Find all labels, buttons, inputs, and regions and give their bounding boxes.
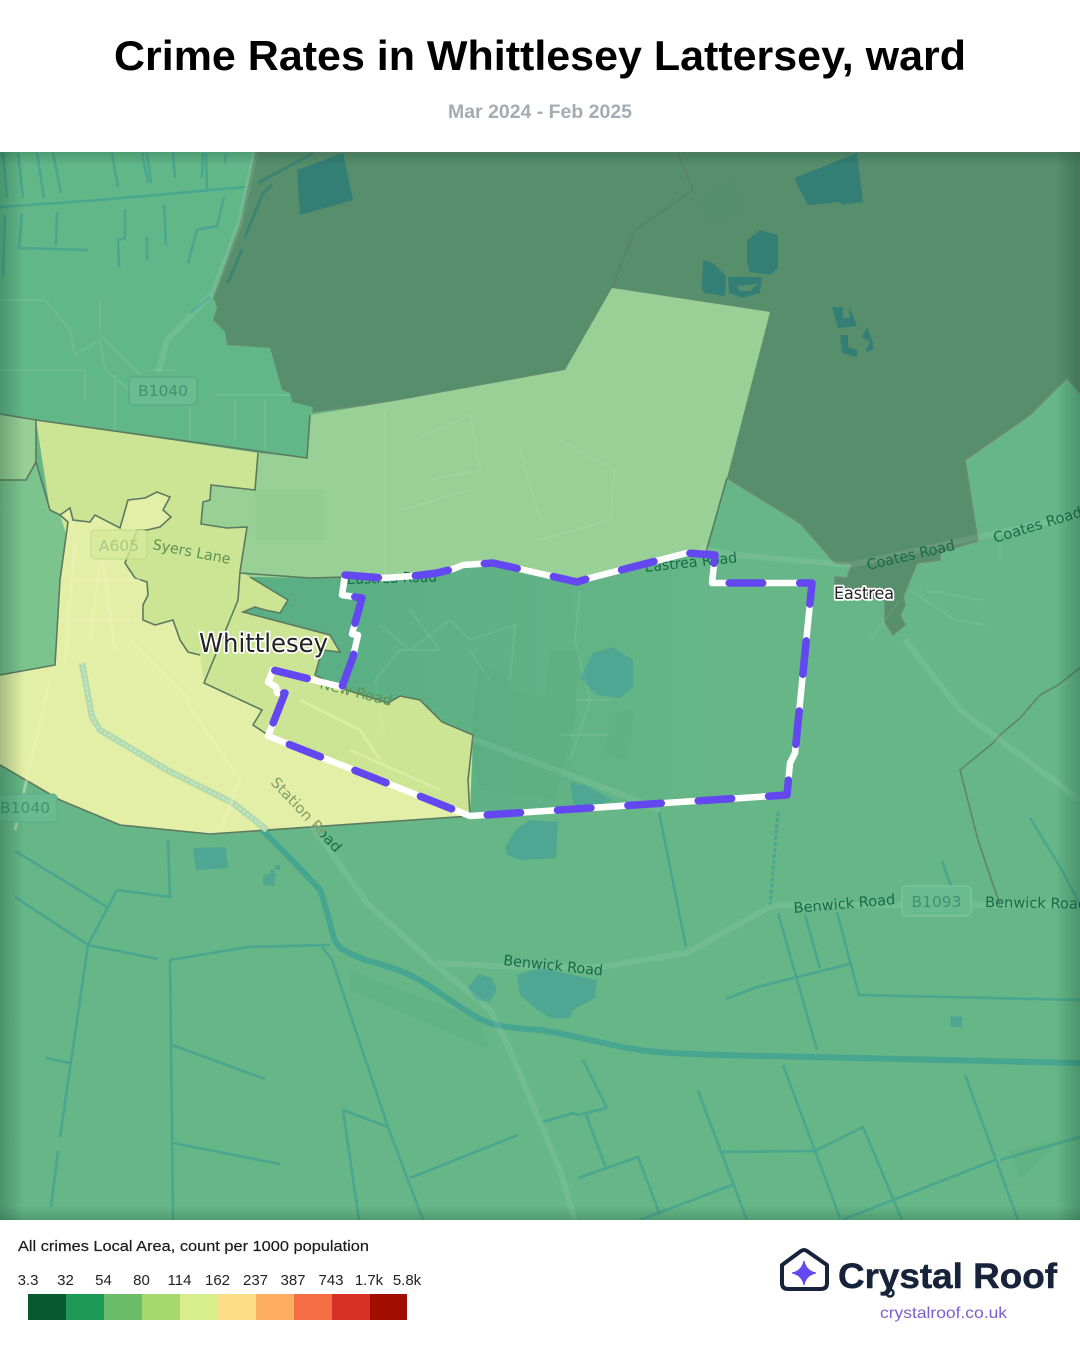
label: Benwick Road south: Benwick Road xyxy=(503,953,604,979)
legend scale labels: 32 xyxy=(57,1272,74,1289)
pond dots xyxy=(270,865,280,877)
road shield: B1040 west: B1040 xyxy=(0,799,50,817)
place label: Whittlesey: Whittlesey xyxy=(199,629,328,659)
legend title: All crimes Local Area, count per 1000 population xyxy=(18,1238,369,1255)
canal centre line xyxy=(82,663,267,830)
road shield: B1093: B1093 xyxy=(911,893,962,911)
legend scale labels xyxy=(18,1272,422,1289)
legend scale labels: 5.8k xyxy=(393,1272,422,1289)
land patches xyxy=(470,735,472,743)
drains in dark area xyxy=(228,153,313,283)
wordmark: Crystal Roof xyxy=(838,1257,1057,1296)
subtitle: date range: Mar 2024 - Feb 2025 xyxy=(448,102,632,123)
ward outline white base xyxy=(268,553,812,816)
legend scale labels: 237 xyxy=(243,1272,268,1289)
label: Coates Road 1: Coates Road xyxy=(865,538,957,574)
logo: Crystal Roof xyxy=(782,1250,1057,1322)
neighbourhood boundaries xyxy=(0,153,1080,905)
place label: Eastrea: Eastrea xyxy=(834,584,894,603)
water features: drains and ponds xyxy=(0,153,1080,1220)
ponds north xyxy=(297,153,873,357)
legend colour ramp xyxy=(28,1294,407,1320)
label: Benwick Road centre: Benwick Road xyxy=(793,892,896,917)
main roads xyxy=(158,153,1080,1220)
website url: crystalroof.co.uk xyxy=(880,1305,1008,1322)
area: dark low-crime north xyxy=(213,152,1080,635)
river xyxy=(262,830,1080,1063)
legend scale labels: 114 xyxy=(168,1272,191,1289)
panel: choropleth map xyxy=(0,152,1080,1220)
label: Eastrea Road west: Eastrea Road xyxy=(347,570,437,588)
area: west mid neighbourhood xyxy=(0,462,68,675)
ring pond xyxy=(728,277,762,298)
map edge vignette xyxy=(0,152,1080,1220)
estate roads xyxy=(0,300,1000,760)
label: New Road: New Road xyxy=(318,676,394,710)
legend scale labels: 3.3 xyxy=(18,1272,38,1289)
legend scale labels: 162 xyxy=(205,1272,230,1289)
legend scale labels: 1.7k xyxy=(355,1272,384,1289)
legend xyxy=(18,1238,422,1320)
road shield: B1040 west xyxy=(0,794,57,822)
wordmark key dot xyxy=(886,1290,894,1296)
label: Station Road: Station Road xyxy=(267,775,344,856)
road shield: A605 xyxy=(91,530,147,559)
map base area xyxy=(0,379,1080,1220)
canal on yellow area xyxy=(82,663,267,830)
ward outline purple dashes xyxy=(268,553,812,816)
area: central yellow highest crime xyxy=(0,492,470,834)
label: Eastrea Road east: Eastrea Road xyxy=(644,550,738,576)
road shield: A605: A605 xyxy=(99,537,139,555)
roads and land use xyxy=(0,153,1080,1220)
area: north-west neighbourhood xyxy=(212,152,313,412)
road shield: B1093 xyxy=(902,886,971,916)
label: Syers Lane: Syers Lane xyxy=(151,537,232,568)
icon: purple sparkle xyxy=(792,1261,816,1285)
short thick drain xyxy=(770,812,778,905)
selected ward outline xyxy=(268,553,812,816)
road labels xyxy=(0,377,1080,979)
yellow area streets xyxy=(15,540,440,830)
title: Crime Rates in Whittlesey Lattersey, ward xyxy=(114,32,966,79)
legend scale labels: 387 xyxy=(280,1272,306,1289)
road shield: B1040 north: B1040 xyxy=(138,382,188,400)
area: yellow-green neighbourhoods xyxy=(36,420,473,815)
housing pattern xyxy=(255,490,256,491)
legend scale labels: 743 xyxy=(318,1272,344,1289)
legend scale labels: 80 xyxy=(133,1272,150,1289)
area: selected ward interior xyxy=(246,569,466,730)
drains north-west xyxy=(0,153,245,313)
road shield: B1040 north xyxy=(129,377,197,405)
ponds south xyxy=(193,647,962,1027)
icon: house outline xyxy=(782,1250,827,1289)
area: light green ward xyxy=(201,288,770,582)
area: west side neighbourhoods xyxy=(0,414,36,480)
drains south xyxy=(15,812,1080,1220)
legend scale labels: 54 xyxy=(95,1272,112,1289)
ring pond island xyxy=(737,284,758,291)
